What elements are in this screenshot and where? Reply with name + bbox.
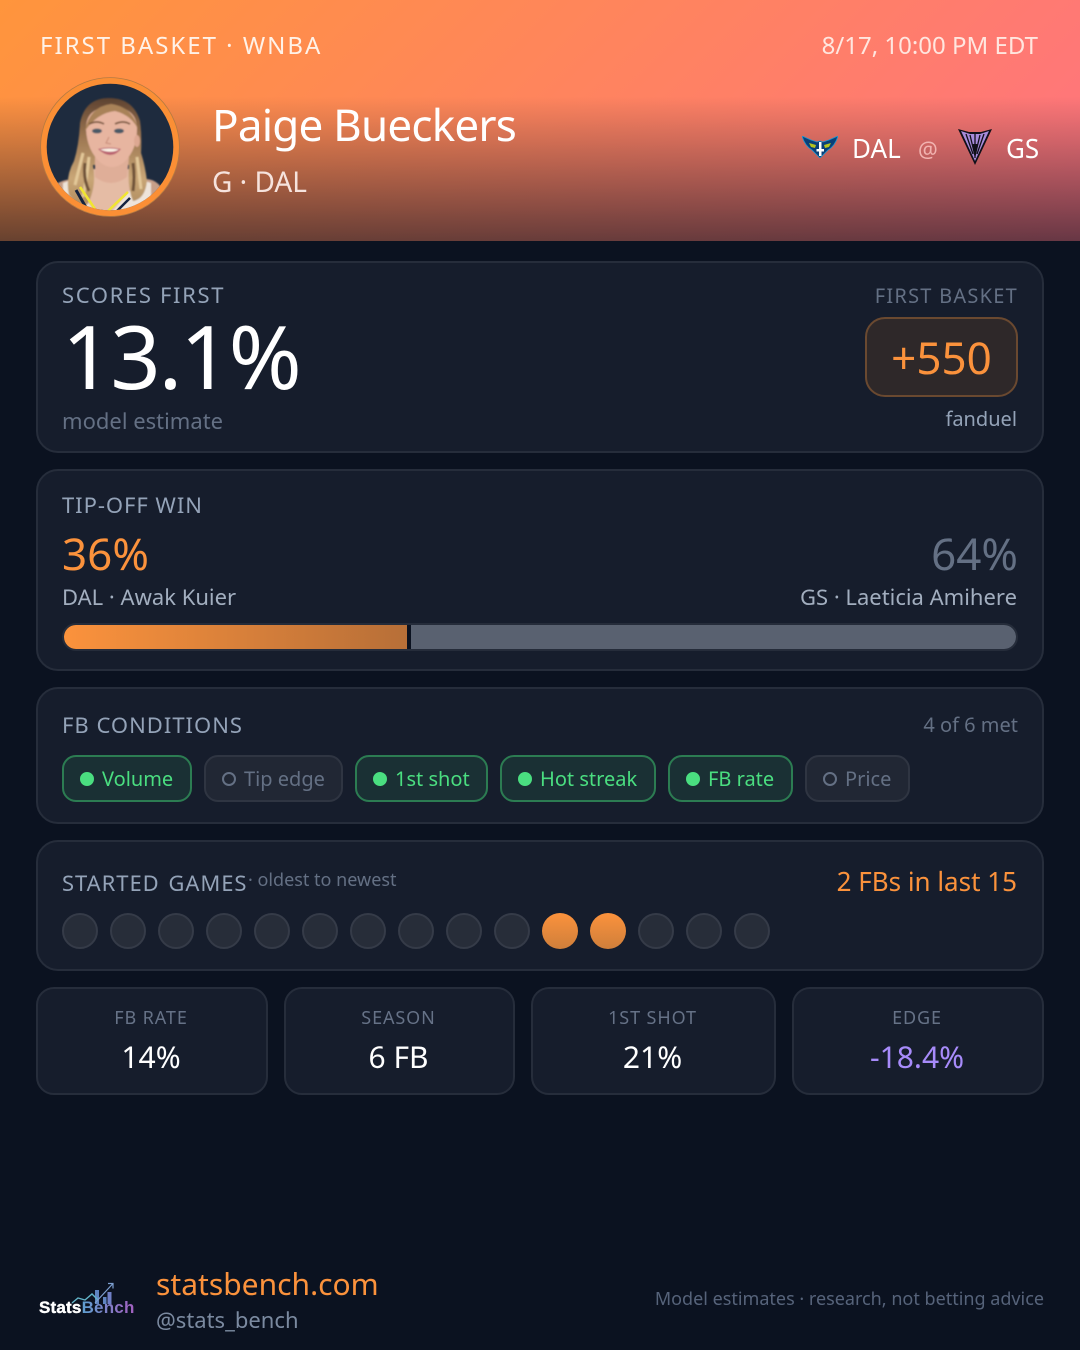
icon: Dallas Wings logo — [802, 136, 838, 158]
first basket label: FIRST BASKET — [875, 282, 1018, 309]
header kicker: FIRST BASKET · WNBA — [40, 29, 322, 62]
probability value: 13.1% — [62, 295, 300, 415]
started games label: STARTED GAMES — [62, 868, 247, 898]
chip: 1st shot: 1st shot — [395, 765, 470, 792]
stat: 1st shot: 21% — [623, 1036, 682, 1077]
at symbol: @ — [918, 134, 938, 164]
tip-off label: TIP-OFF WIN — [62, 490, 203, 520]
Golden State tip percent: 64% — [931, 523, 1018, 583]
footer site link: statsbench.com — [156, 1263, 379, 1304]
hair — [68, 98, 147, 205]
chest — [88, 168, 130, 210]
chip: Tip edge — [204, 755, 343, 802]
matchup — [802, 129, 1039, 166]
stat: FB rate: 14% — [121, 1036, 181, 1077]
recent first baskets: 2 FBs in last 15 — [837, 863, 1017, 899]
logo chart mark — [72, 1282, 114, 1304]
collar — [80, 187, 95, 209]
logo wordmark: StatsBench — [39, 1298, 135, 1317]
mouth — [98, 148, 121, 155]
Golden State share — [411, 625, 1016, 649]
footer logo — [39, 1282, 135, 1317]
neck — [95, 157, 129, 183]
model estimate caption: model estimate — [62, 406, 223, 436]
chip: Tip edge: Tip edge — [244, 765, 325, 792]
header banner — [0, 0, 1080, 241]
disclaimer: Model estimates · research, not betting advice — [655, 1287, 1044, 1311]
chip: Price — [805, 755, 910, 802]
chip: Hot streak — [500, 755, 656, 802]
stat: FB rate — [36, 987, 268, 1095]
panel: FB conditions — [36, 687, 1044, 824]
stat: season: SEASON — [361, 1006, 436, 1030]
chip: Hot streak: Hot streak — [540, 765, 637, 792]
odds badge — [865, 317, 1018, 397]
Golden State jumper: GS · Laeticia Amihere — [800, 582, 1017, 612]
stat: 1st shot — [531, 987, 776, 1095]
conditions label: FB CONDITIONS — [62, 710, 243, 740]
stat: 1st shot: 1ST SHOT — [608, 1006, 697, 1030]
stat: FB rate: FB RATE — [114, 1006, 188, 1030]
player name: Paige Bueckers — [212, 94, 516, 154]
chip: FB rate: FB rate — [708, 765, 774, 792]
player portrait — [40, 77, 180, 217]
panel: scores first — [36, 261, 1044, 453]
sportsbook name: fanduel — [945, 405, 1017, 432]
conditions met count: 4 of 6 met — [923, 711, 1018, 738]
home team code: GS — [1006, 130, 1039, 166]
chip: FB rate — [668, 755, 793, 802]
player position and team: G · DAL — [212, 163, 307, 201]
scores first label: SCORES FIRST — [62, 280, 225, 310]
game dots strip — [62, 913, 770, 949]
order note: · oldest to newest — [248, 868, 396, 892]
chip: Volume — [62, 755, 192, 802]
face — [85, 110, 138, 158]
stat: season: 6 FB — [368, 1036, 429, 1077]
chip: Price: Price — [845, 765, 891, 792]
panel: started games — [36, 840, 1044, 971]
chip: Volume: Volume — [102, 765, 173, 792]
footer handle: @stats_bench — [156, 1305, 299, 1335]
stat: edge: -18.4% — [870, 1036, 964, 1077]
Dallas share — [64, 625, 407, 649]
chip: 1st shot — [355, 755, 488, 802]
stat: edge: EDGE — [892, 1006, 942, 1030]
game date: 8/17, 10:00 PM EDT — [822, 29, 1038, 62]
Dallas tip percent: 36% — [62, 523, 149, 583]
tip-off split bar — [62, 623, 1018, 651]
away team code: DAL — [852, 130, 901, 166]
eyes and brows — [92, 129, 102, 133]
stat: edge — [792, 987, 1044, 1095]
shoulders and top — [58, 178, 160, 196]
stat: season — [284, 987, 515, 1095]
panel: tip-off win — [36, 469, 1044, 671]
odds badge: +550 — [891, 327, 992, 387]
icon: Golden State Valkyries logo — [958, 129, 992, 165]
Dallas jumper: DAL · Awak Kuier — [62, 582, 236, 612]
